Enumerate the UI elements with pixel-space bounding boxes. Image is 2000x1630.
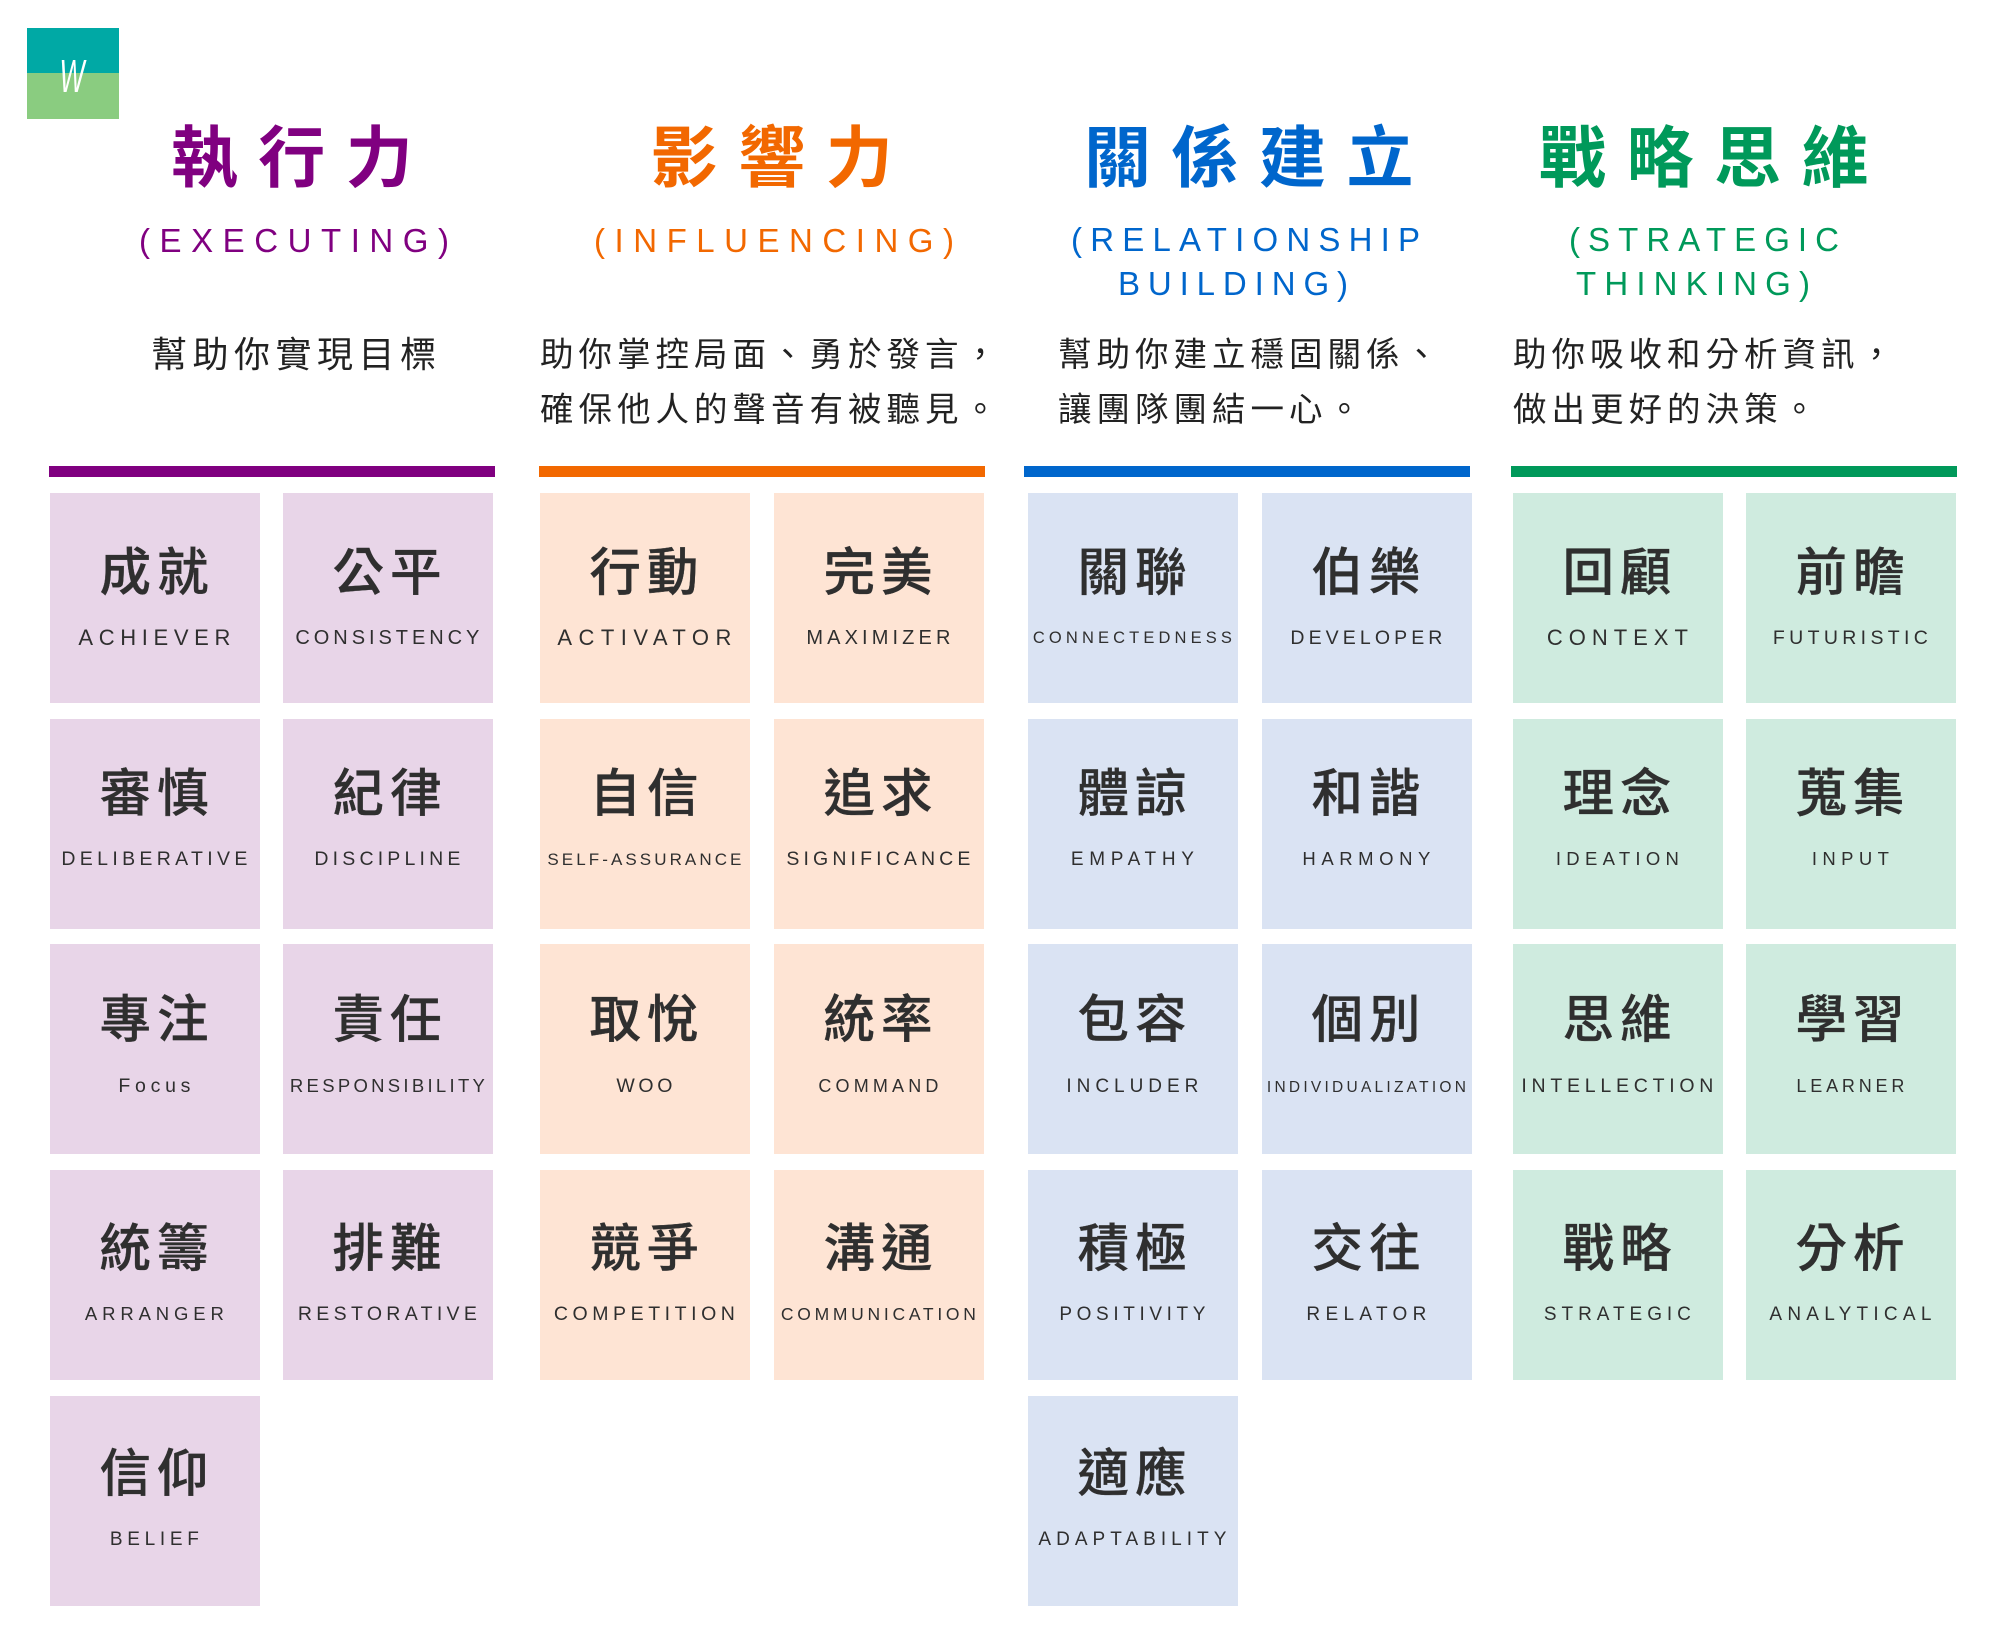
card: positivity: 積極 (1077, 1220, 1193, 1278)
card: strategic (1513, 1170, 1723, 1380)
card: ideation: 理念 (1562, 764, 1678, 822)
card: developer: 伯樂 (1311, 544, 1427, 602)
card: empathy: EMPATHY (1071, 849, 1194, 870)
card: communication: 溝通 (823, 1220, 939, 1278)
card: analytical: ANALYTICAL (1769, 1304, 1931, 1325)
heading: strategic thinking title: 戰略思維 (1539, 122, 1889, 196)
card: activator: ACTIVATOR (557, 625, 731, 650)
card: activator (540, 493, 750, 703)
description: strategic thinking: 做出更好的決策。 (1513, 392, 1821, 429)
card: self-assurance: SELF-ASSURANCE (547, 850, 741, 869)
heading: influencing title: 影響力 (651, 122, 913, 196)
description: relationship building (1058, 337, 1443, 429)
card: belief (50, 1396, 260, 1606)
card: activator: 行動 (589, 544, 705, 602)
card: ideation: IDEATION (1556, 848, 1679, 869)
card: positivity (1028, 1170, 1238, 1380)
card: intellection: INTELLECTION (1521, 1075, 1713, 1097)
card: deliberative: DELIBERATIVE (61, 848, 247, 870)
divider bar: relationship building (1024, 466, 1470, 477)
card: maximizer: 完美 (823, 544, 939, 602)
card: achiever (50, 493, 260, 703)
card: achiever: 成就 (99, 544, 215, 602)
card: individualization: 個別 (1311, 990, 1427, 1048)
card: maximizer (774, 493, 984, 703)
card: positivity: POSITIVITY (1059, 1304, 1206, 1325)
column: relationship building (1024, 122, 1472, 1606)
heading: relationship building title: 關係建立 (1084, 122, 1434, 196)
card: woo: 取悅 (589, 990, 705, 1048)
card: significance: SIGNIFICANCE (786, 848, 970, 870)
card: adaptability (1028, 1396, 1238, 1606)
card: self-assurance (540, 719, 750, 929)
card: deliberative: 審慎 (99, 764, 215, 822)
card: connectedness (1028, 493, 1238, 703)
card: developer: DEVELOPER (1290, 627, 1442, 649)
card: individualization (1262, 944, 1472, 1154)
card: focus: Focus (118, 1075, 191, 1097)
card: significance: 追求 (823, 764, 939, 822)
card: self-assurance: 自信 (589, 764, 705, 822)
card: harmony (1262, 719, 1472, 929)
card: deliberative (50, 719, 260, 929)
card: relator: RELATOR (1306, 1304, 1426, 1325)
card: relator (1262, 1170, 1472, 1380)
divider bar: influencing (539, 466, 985, 477)
card: includer: 包容 (1077, 990, 1193, 1048)
card: command: COMMAND (818, 1076, 938, 1096)
card: context (1513, 493, 1723, 703)
card: communication (774, 1170, 984, 1380)
english subtitle: strategic thinking: (STRATEGIC (1569, 221, 1839, 258)
card: input: 蒐集 (1795, 764, 1911, 822)
logo: W (60, 50, 87, 102)
card: harmony: 和諧 (1311, 764, 1427, 822)
divider bar: strategic thinking (1511, 466, 1957, 477)
card: learner: LEARNER (1796, 1076, 1904, 1096)
card: restorative (283, 1170, 493, 1380)
description: strategic thinking (1513, 337, 1898, 429)
divider bar: executing (49, 466, 495, 477)
card: consistency: 公平 (332, 544, 448, 602)
description: relationship building: 讓團隊團結一心。 (1058, 392, 1366, 429)
card: context: 回顧 (1562, 544, 1678, 602)
card: intellection (1513, 944, 1723, 1154)
card: input: INPUT (1812, 848, 1889, 869)
card: woo: WOO (616, 1075, 672, 1097)
card: individualization: INDIVIDUALIZATION (1267, 1079, 1466, 1096)
card: harmony: HARMONY (1302, 848, 1430, 869)
card: includer (1028, 944, 1238, 1154)
card: communication: COMMUNICATION (781, 1304, 976, 1324)
card: focus (50, 944, 260, 1154)
card: belief: BELIEF (110, 1529, 199, 1550)
english subtitle: influencing: (INFLUENCING) (594, 222, 954, 259)
card: connectedness: 關聯 (1077, 544, 1193, 602)
card: command: 統率 (823, 990, 939, 1048)
card: ideation (1513, 719, 1723, 929)
column: influencing (539, 122, 1002, 1380)
description: relationship building: 幫助你建立穩固關係、 (1058, 337, 1443, 374)
card: consistency (283, 493, 493, 703)
card: arranger: 統籌 (99, 1220, 215, 1278)
card: maximizer: MAXIMIZER (806, 627, 950, 649)
card: woo (540, 944, 750, 1154)
card: empathy (1028, 719, 1238, 929)
card: analytical (1746, 1170, 1956, 1380)
english subtitle: strategic thinking: THINKING) (1576, 265, 1810, 302)
card: restorative: 排難 (332, 1220, 448, 1278)
card: discipline (283, 719, 493, 929)
card: futuristic: 前瞻 (1795, 544, 1911, 602)
card: strategic: 戰略 (1562, 1220, 1678, 1278)
card: competition: COMPETITION (554, 1303, 735, 1325)
card: learner: 學習 (1795, 990, 1911, 1048)
card: input (1746, 719, 1956, 929)
card: significance (774, 719, 984, 929)
card: responsibility (283, 944, 493, 1154)
column: executing (49, 122, 495, 1606)
card: adaptability: ADAPTABILITY (1038, 1529, 1227, 1550)
heading: executing title: 執行力 (171, 122, 433, 196)
english subtitle: relationship building: BUILDING) (1118, 265, 1348, 302)
card: discipline: 紀律 (332, 764, 448, 822)
card: responsibility: 責任 (332, 990, 448, 1048)
card: adaptability: 適應 (1077, 1444, 1193, 1502)
card: learner (1746, 944, 1956, 1154)
card: arranger (50, 1170, 260, 1380)
card: consistency: CONSISTENCY (295, 627, 479, 649)
card: includer: INCLUDER (1066, 1076, 1198, 1097)
description: influencing (540, 337, 1002, 429)
column: strategic thinking (1511, 122, 1957, 1380)
card: belief: 信仰 (99, 1444, 215, 1502)
description: influencing: 助你掌控局面、勇於發言， (540, 337, 1002, 374)
english subtitle: executing: (EXECUTING) (139, 222, 449, 259)
english subtitle: relationship building (1071, 221, 1420, 302)
card: command (774, 944, 984, 1154)
card: discipline: DISCIPLINE (314, 848, 460, 870)
card: arranger: ARRANGER (85, 1303, 224, 1324)
english subtitle: relationship building: (RELATIONSHIP (1071, 221, 1420, 258)
card: futuristic (1746, 493, 1956, 703)
card: analytical: 分析 (1795, 1220, 1911, 1278)
card: connectedness: CONNECTEDNESS (1033, 629, 1232, 647)
card: competition (540, 1170, 750, 1380)
card: competition: 競爭 (589, 1220, 705, 1278)
card: developer (1262, 493, 1472, 703)
card: empathy: 體諒 (1077, 764, 1193, 822)
card: strategic: STRATEGIC (1544, 1304, 1691, 1325)
card: restorative: RESTORATIVE (298, 1303, 477, 1325)
card: context: CONTEXT (1547, 625, 1688, 650)
description: influencing: 確保他人的聲音有被聽見。 (540, 392, 1002, 429)
card: futuristic: FUTURISTIC (1773, 627, 1928, 649)
card: relator: 交往 (1311, 1220, 1427, 1278)
description: executing: 幫助你實現目標 (151, 334, 442, 375)
card: intellection: 思維 (1562, 990, 1678, 1048)
card: responsibility: RESPONSIBILITY (290, 1075, 485, 1096)
card: achiever: ACHIEVER (78, 625, 230, 650)
logo (27, 28, 119, 119)
card: focus: 專注 (99, 990, 215, 1048)
description: strategic thinking: 助你吸收和分析資訊， (1513, 337, 1898, 374)
english subtitle: strategic thinking (1569, 221, 1839, 302)
